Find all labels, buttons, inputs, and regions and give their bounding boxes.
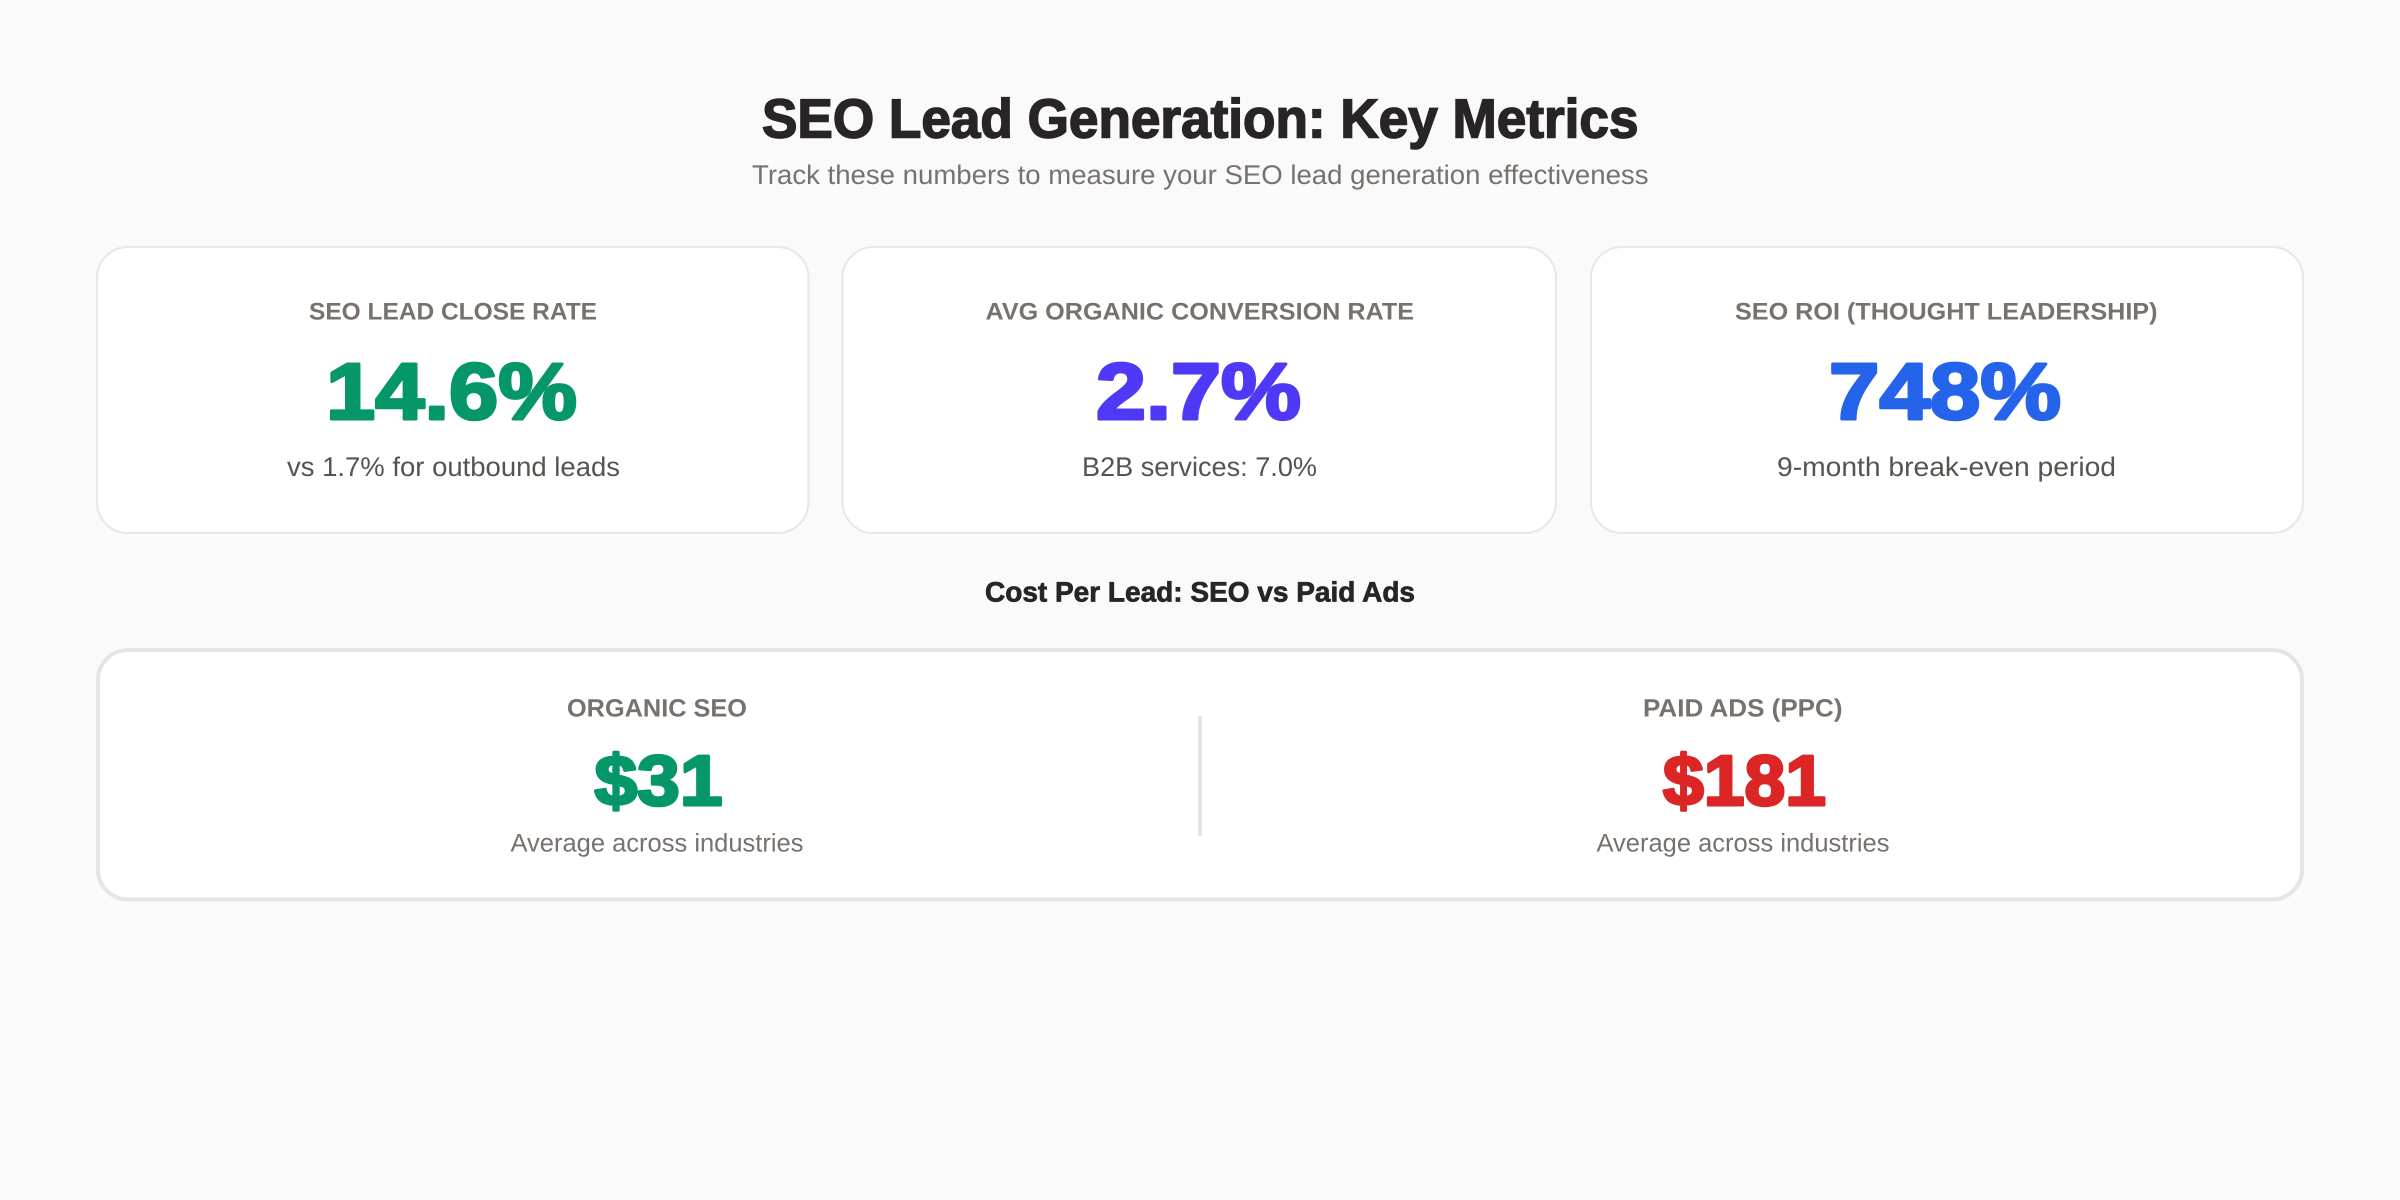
subtitle: Track these numbers to measure your SEO lead generation effectiveness (752, 160, 1648, 190)
column label: ORGANIC SEO (567, 695, 747, 723)
column note: Average across industries (1596, 830, 1890, 858)
metric note: B2B services: 7.0% (1082, 452, 1317, 482)
column divider (1198, 716, 1202, 836)
panel: average organic conversion rate (842, 247, 1556, 533)
panel: cost per lead comparison (98, 650, 2302, 900)
column note: Average across industries (510, 830, 804, 858)
section heading: cost per lead: Cost Per Lead: SEO vs Paid Ads (985, 577, 1415, 608)
metric value: 2.7% (1096, 347, 1301, 436)
metric value: 14.6% (326, 347, 577, 436)
metric label: AVG ORGANIC CONVERSION RATE (986, 298, 1414, 325)
metric value: 748% (1829, 347, 2061, 436)
panel: SEO ROI thought leadership (1591, 247, 2303, 533)
metric label: SEO ROI (THOUGHT LEADERSHIP) (1735, 298, 2158, 325)
column value: $31 (594, 742, 722, 821)
card background (97, 247, 808, 533)
metric note: 9-month break-even period (1777, 452, 2116, 482)
title: SEO Lead Generation: Key Metrics (762, 88, 1638, 150)
column: paid ads (1596, 695, 1890, 858)
metric label: SEO LEAD CLOSE RATE (309, 298, 597, 325)
comparison background (98, 650, 2302, 900)
metric note: vs 1.7% for outbound leads (287, 452, 620, 482)
panel: SEO lead close rate (97, 247, 808, 533)
card background (842, 247, 1556, 533)
card background (1591, 247, 2303, 533)
column: organic SEO (510, 695, 804, 858)
column label: PAID ADS (PPC) (1643, 695, 1842, 723)
column value: $181 (1663, 742, 1826, 821)
